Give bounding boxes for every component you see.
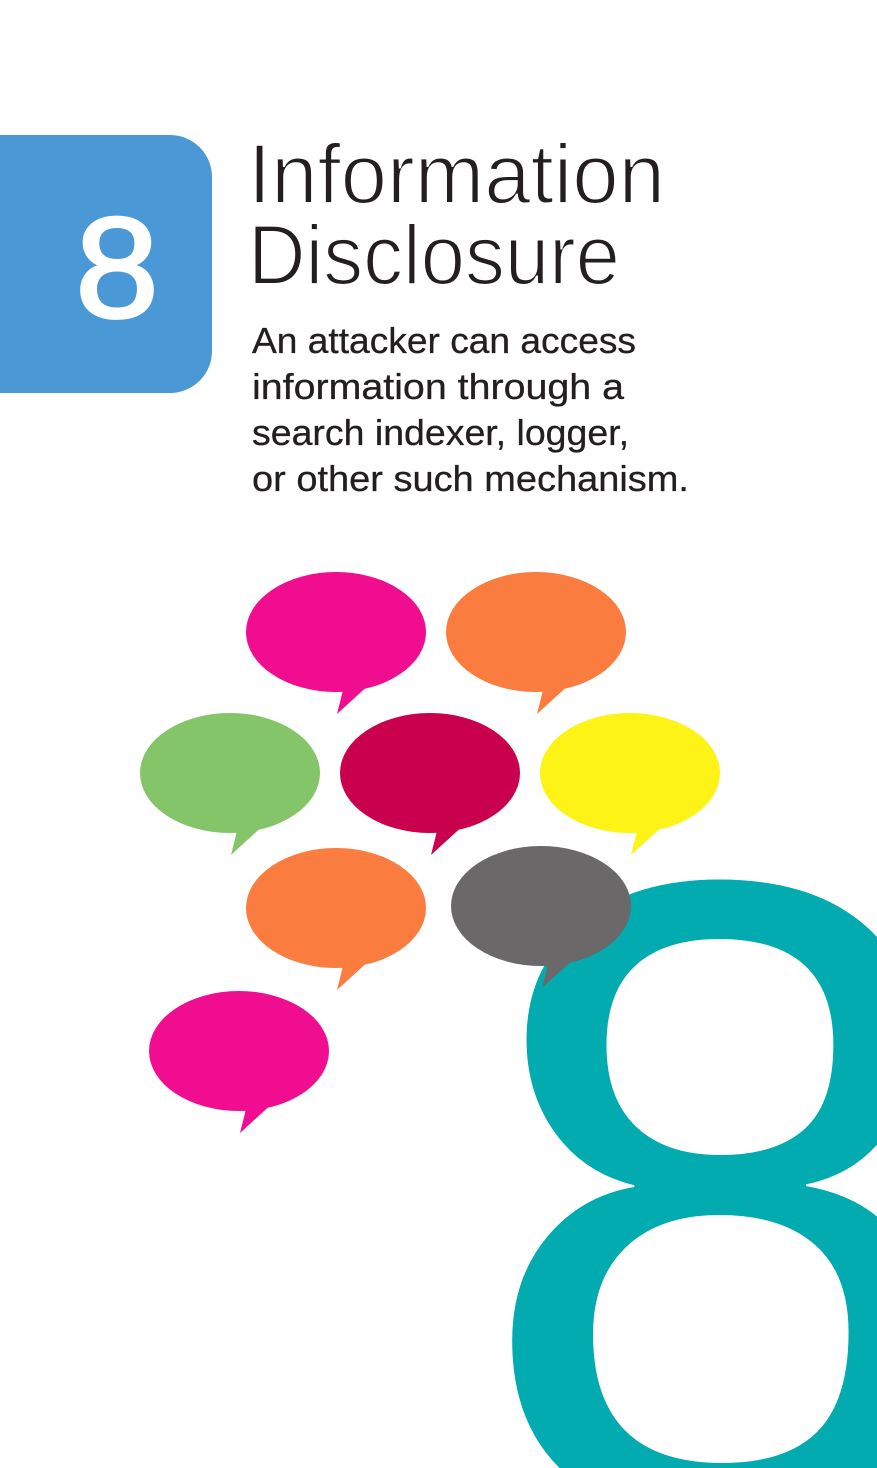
description: search indexer, logger, <box>252 412 629 453</box>
description <box>252 320 689 499</box>
description: information through a <box>252 366 625 407</box>
bubble: pink lower <box>149 991 329 1133</box>
title <box>248 127 665 302</box>
bubble: crimson <box>340 713 520 855</box>
bubble: orange top <box>446 572 626 714</box>
title: Disclosure <box>248 208 620 302</box>
bubble: pink top <box>246 572 426 714</box>
speech bubbles <box>140 572 720 1133</box>
bubble: gray <box>451 846 631 988</box>
number badge <box>0 135 212 393</box>
description: An attacker can access <box>252 320 636 361</box>
number badge: 8 <box>75 188 159 348</box>
bubble: green <box>140 713 320 855</box>
bubble: yellow <box>540 713 720 855</box>
title: Information <box>248 127 665 221</box>
description: or other such mechanism. <box>252 458 689 499</box>
bubble: orange lower <box>246 848 426 990</box>
